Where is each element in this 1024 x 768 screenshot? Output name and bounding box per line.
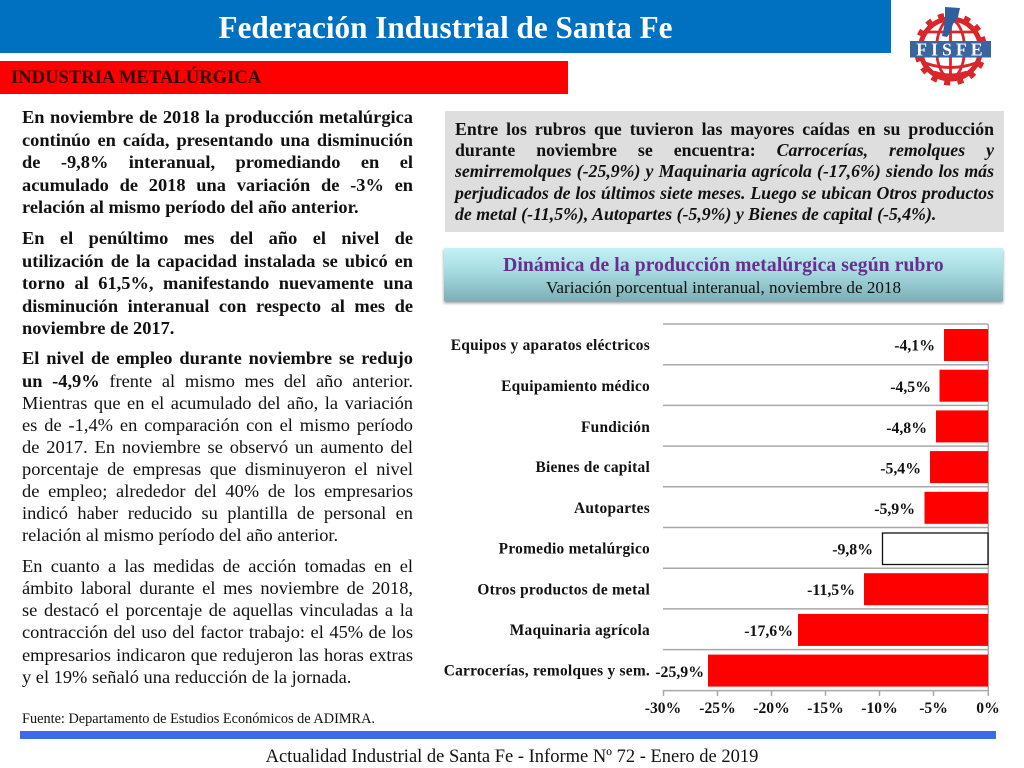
section heading bar bbox=[0, 61, 568, 94]
paragraph: employment: Mientras que en el acumulado del año, la variación bbox=[22, 392, 413, 412]
icon: FISFE logo bbox=[910, 7, 991, 86]
axis labels: 0% bbox=[976, 700, 1000, 717]
value labels: -4,1% bbox=[894, 338, 935, 354]
paragraph: labour measures: y el 19% señaló una reducción de la jornada. bbox=[22, 667, 351, 687]
paragraph: employment bbox=[22, 348, 413, 545]
section heading: INDUSTRIA METALÚRGICA bbox=[11, 67, 261, 88]
paragraph: production: acumulado de 2018 una variación de -3% en bbox=[22, 174, 413, 194]
callout: largest falls bbox=[445, 111, 1004, 232]
value labels bbox=[655, 338, 935, 681]
axis labels: -30% bbox=[645, 700, 681, 717]
chart title: Dinámica de la producción metalúrgica según rubro bbox=[503, 255, 944, 276]
paragraph: employment: es de -1,4% en comparación con el mismo período bbox=[22, 414, 413, 434]
paragraph: production bbox=[22, 107, 413, 217]
paragraph: capacity bbox=[22, 228, 413, 338]
callout: largest falls: durante noviembre se encuentra: Carrocerías, remolques y bbox=[455, 140, 994, 160]
paragraph: labour measures bbox=[22, 556, 413, 687]
paragraph: capacity: disminución interanual con respecto al mes de bbox=[22, 296, 413, 316]
paragraph: capacity: noviembre de 2017. bbox=[22, 318, 174, 338]
paragraph: capacity: utilización de la capacidad instalada se ubicó en bbox=[22, 250, 413, 270]
axis labels: -15% bbox=[807, 700, 844, 717]
category labels: Carrocerías, remolques y sem. bbox=[444, 662, 650, 680]
paragraph: labour measures: se destacó el porcentaje de aquellas vinculadas a la bbox=[22, 600, 413, 620]
footer bar bbox=[20, 731, 996, 739]
category labels: Otros productos de metal bbox=[477, 582, 650, 598]
value labels: -5,4% bbox=[880, 460, 921, 478]
category labels: Maquinaria agrícola bbox=[510, 622, 650, 639]
bars bbox=[708, 329, 988, 687]
paragraph: employment: indicó haber reducido su plantilla de personal en bbox=[22, 503, 413, 523]
paragraph: employment: un -4,9% frente al mismo mes del año anterior. bbox=[22, 370, 413, 390]
category labels: Fundición bbox=[581, 419, 650, 436]
axis labels: -10% bbox=[861, 700, 898, 717]
text block: production and employment bbox=[22, 107, 413, 687]
paragraph: production: continúo en caída, presentando una disminución bbox=[22, 130, 413, 150]
value labels: -4,8% bbox=[886, 420, 927, 437]
header banner bbox=[0, 0, 891, 53]
category labels: Autopartes bbox=[574, 500, 650, 517]
source note: Fuente: Departamento de Estudios Económicos de ADIMRA. bbox=[22, 711, 375, 727]
category labels bbox=[444, 337, 650, 680]
paragraph: labour measures: empresarios indicaron que redujeron las horas extras bbox=[22, 645, 413, 665]
paragraph: employment: porcentaje de empresas que disminuyeron el nivel bbox=[22, 459, 413, 479]
category labels: Equipos y aparatos eléctricos bbox=[451, 337, 650, 354]
axis labels: -20% bbox=[753, 700, 790, 717]
icon: FISFE logo: FISFE bbox=[916, 40, 987, 60]
paragraph: labour measures: En cuanto a las medidas de acción tomadas en el bbox=[22, 556, 413, 576]
value labels: -11,5% bbox=[807, 582, 855, 599]
paragraph: capacity: En el penúltimo mes del año el nivel de bbox=[22, 228, 413, 248]
callout: largest falls: Entre los rubros que tuvieron las mayores caídas en su producción bbox=[455, 119, 994, 139]
chart heading box bbox=[444, 248, 1003, 301]
axis labels: -25% bbox=[699, 700, 736, 717]
paragraph: production: relación al mismo período del año anterior. bbox=[22, 197, 359, 217]
axis labels: -5% bbox=[919, 700, 948, 717]
category labels: Equipamiento médico bbox=[501, 378, 650, 395]
bar chart bbox=[444, 323, 1000, 717]
value labels: -5,9% bbox=[874, 501, 915, 518]
paragraph: employment: El nivel de empleo durante noviembre se redujo bbox=[22, 348, 413, 368]
bar: average bbox=[882, 533, 988, 564]
value labels: -17,6% bbox=[744, 623, 793, 640]
paragraph: capacity: torno al 61,5%, manifestando nuevamente una bbox=[22, 273, 413, 293]
chart subtitle: Variación porcentual interanual, noviembre de 2018 bbox=[546, 278, 901, 296]
paragraph: production: En noviembre de 2018 la producción metalúrgica bbox=[22, 107, 413, 127]
value labels: -25,9% bbox=[655, 664, 704, 681]
paragraph: production: de -9,8% interanual, promediando en el bbox=[22, 152, 413, 172]
paragraph: employment: de empleo; alrededor del 40% de los empresarios bbox=[22, 481, 413, 501]
category labels: Promedio metalúrgico bbox=[499, 540, 650, 558]
title: Federación Industrial de Santa Fe bbox=[219, 10, 672, 45]
footer text: Actualidad Industrial de Santa Fe - Informe Nº 72 - Enero de 2019 bbox=[266, 746, 758, 766]
callout: largest falls: semirremolques (-25,9%) y Maquinaria agrícola (-17,6%) siendo los más bbox=[455, 161, 994, 181]
value labels: -9,8% bbox=[832, 542, 873, 558]
category labels: Bienes de capital bbox=[535, 459, 650, 476]
paragraph: labour measures: contracción del uso del factor trabajo: el 45% de los bbox=[22, 622, 413, 642]
paragraph: employment: relación al mismo período del año anterior. bbox=[22, 525, 338, 545]
callout: largest falls: de metal (-11,5%), Autopartes (-5,9%) y Bienes de capital (-5,4%). bbox=[455, 204, 936, 224]
axis labels bbox=[645, 700, 1000, 717]
paragraph: employment: de 2017. En noviembre se observó un aumento del bbox=[22, 436, 413, 456]
callout: largest falls: perjudicados de los últimos siete meses. Luego se ubican Otros productos bbox=[455, 182, 994, 202]
paragraph: labour measures: ámbito laboral durante el mes noviembre de 2018, bbox=[22, 578, 413, 598]
value labels: -4,5% bbox=[890, 379, 931, 396]
